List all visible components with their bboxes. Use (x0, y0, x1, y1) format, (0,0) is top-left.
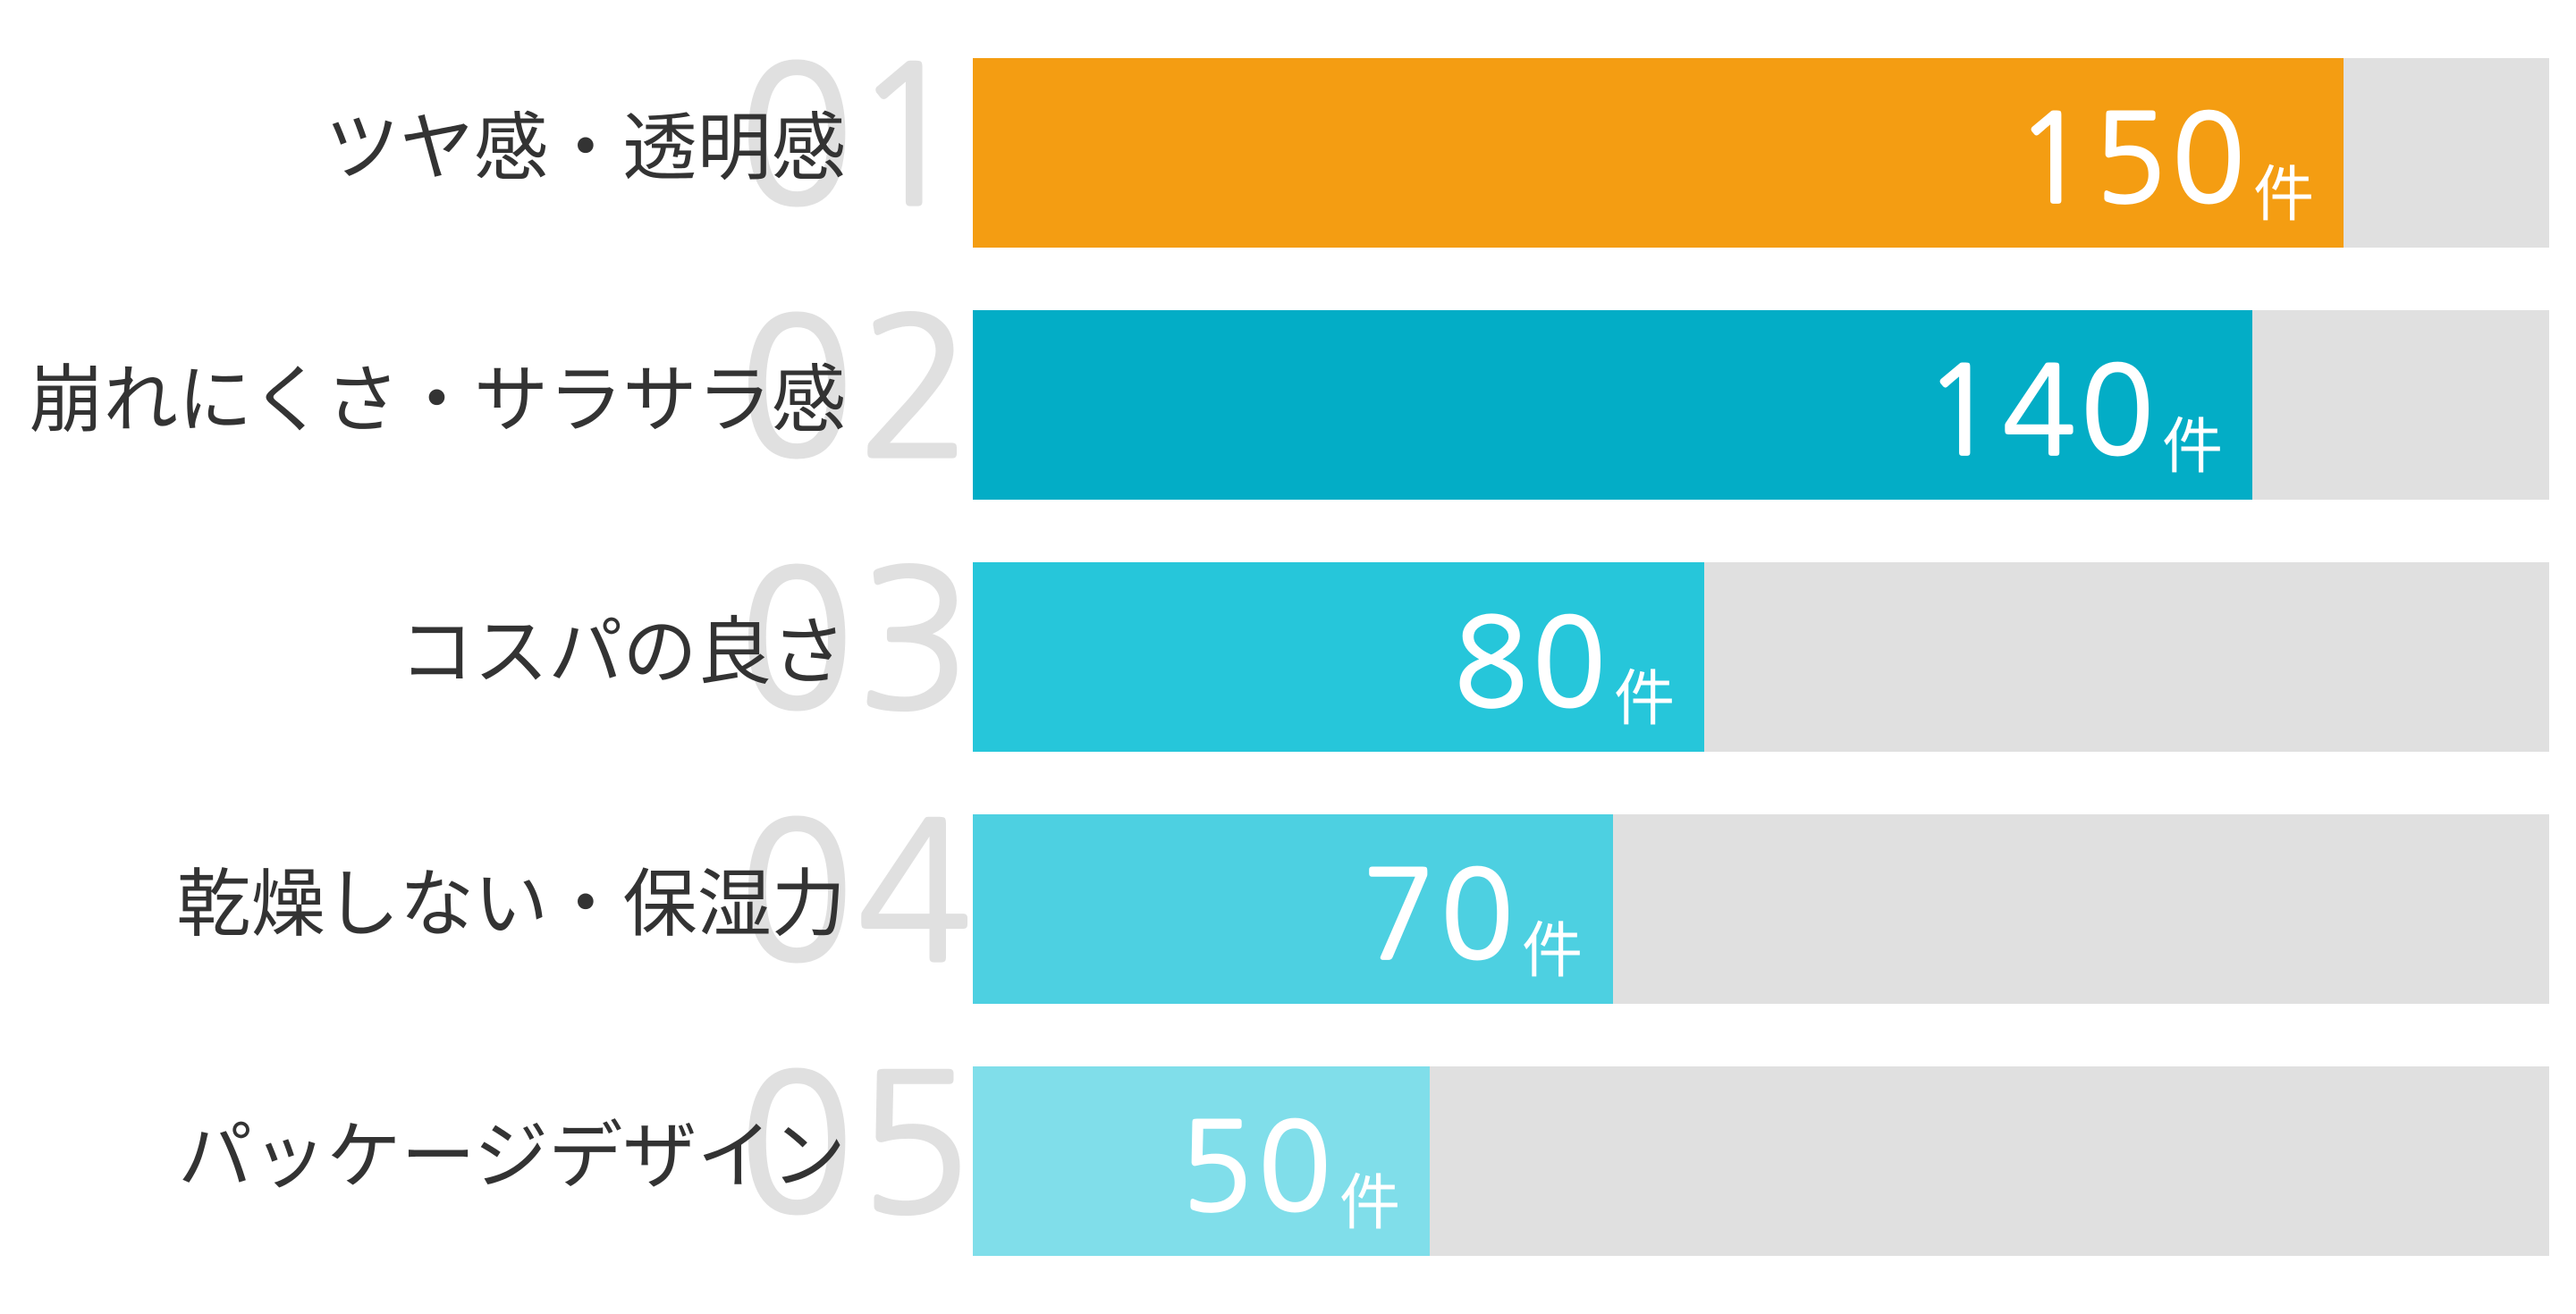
rank number 01: 1 (850, 41, 966, 232)
row 04: 乾燥しない・保湿力 (176, 797, 2549, 1004)
rank number 03: 3 (857, 545, 972, 736)
bar fill: 140 (973, 310, 2252, 500)
bar fill: 80 (973, 562, 1704, 752)
rank number 02: 2 (857, 293, 973, 484)
label: 崩れにくさ・サラサラ感 (30, 358, 846, 442)
row 05: パッケージデザイン (178, 1049, 2549, 1256)
bar track (973, 1066, 2549, 1256)
unit: 件 (2162, 413, 2223, 481)
label: パッケージデザイン (178, 1115, 846, 1198)
value: 140 (1924, 350, 2158, 472)
row 02: 崩れにくさ・サラサラ感 (30, 293, 2549, 500)
unit: 件 (1522, 917, 1583, 985)
rank number 04: 4 (857, 797, 972, 988)
rank number 02: 0 (739, 293, 854, 484)
rank number 05: 5 (857, 1049, 972, 1240)
label: コスパの良さ (400, 611, 846, 694)
rank number 01: 0 (739, 41, 854, 232)
label: ツヤ感・透明感 (325, 106, 846, 190)
rank number 04: 0 (739, 797, 854, 988)
rank number 05: 0 (739, 1049, 854, 1240)
bar track (973, 310, 2549, 500)
value: 50 (1179, 1107, 1336, 1228)
label: 乾燥しない・保湿力 (176, 863, 846, 946)
bar track (973, 562, 2549, 752)
bar fill: 150 (973, 58, 2344, 248)
bar track (973, 814, 2549, 1004)
row 03: コスパの良さ (400, 545, 2549, 752)
row 01: ツヤ感・透明感 (325, 41, 2549, 248)
value: 80 (1454, 602, 1610, 724)
value: 150 (2015, 98, 2250, 220)
unit: 件 (1339, 1169, 1400, 1237)
bar fill: 50 (973, 1066, 1430, 1256)
rank number 03: 0 (739, 545, 854, 736)
bar track (973, 58, 2549, 248)
bar fill: 70 (973, 814, 1613, 1004)
value: 70 (1362, 855, 1518, 976)
unit: 件 (2253, 161, 2314, 229)
unit: 件 (1614, 665, 1675, 733)
